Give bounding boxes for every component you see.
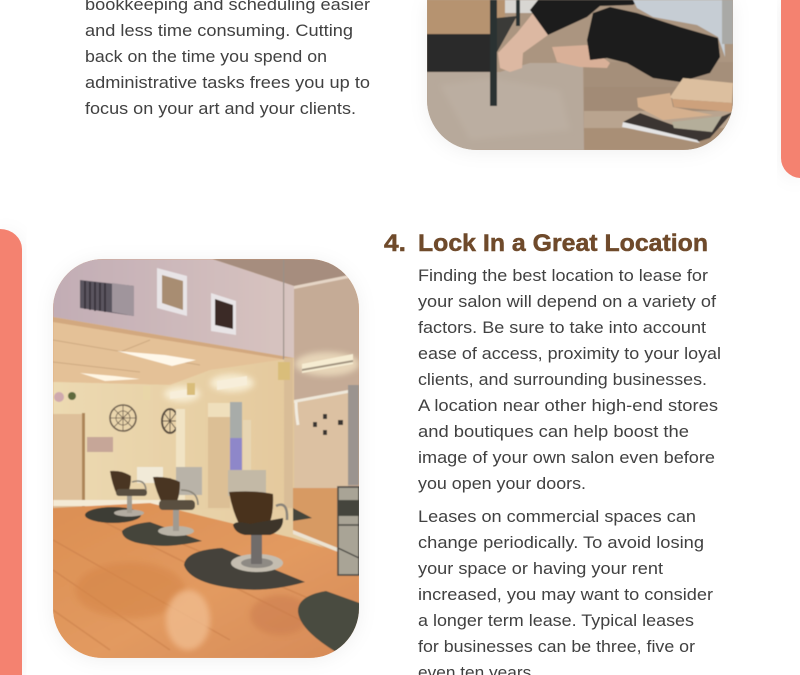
body paragraph: finding a location — [418, 266, 721, 493]
body text: previous section: administrative tasks frees you up to — [85, 73, 370, 92]
body paragraph: leases: a longer term lease. Typical leases — [418, 611, 694, 630]
body paragraph: finding a location: you open your doors. — [418, 474, 586, 493]
body paragraph: leases: for businesses can be three, five or — [418, 637, 695, 656]
body paragraph: finding a location: A location near other high-end stores — [418, 396, 718, 415]
body text: previous section — [85, 0, 370, 118]
body paragraph: finding a location: factors. Be sure to take into account — [418, 318, 706, 337]
body paragraph: finding a location: ease of access, proximity to your loyal — [418, 344, 721, 363]
body paragraph: leases: change periodically. To avoid losing — [418, 533, 704, 552]
body text: previous section: focus on your art and your clients. — [85, 99, 356, 118]
body paragraph: finding a location: your salon will depend on a variety of — [418, 292, 716, 311]
body paragraph: finding a location: clients, and surrounding businesses. — [418, 370, 707, 389]
body text: previous section: back on the time you spend on — [85, 47, 327, 66]
body text: previous section: and less time consuming. Cutting — [85, 21, 353, 40]
photo: hair salon interior — [53, 259, 365, 660]
body paragraph: finding a location: image of your own salon even before — [418, 448, 715, 467]
body paragraph: leases — [418, 507, 713, 675]
coral side bar: left — [0, 229, 22, 675]
heading number: 4. — [384, 230, 406, 257]
body paragraph: finding a location: Finding the best location to lease for — [418, 266, 708, 285]
body paragraph: leases: your space or having your rent — [418, 559, 663, 578]
heading: Lock In a Great Location — [418, 230, 708, 257]
photo: woman sitting on floor with books — [427, 0, 733, 150]
body paragraph: leases: increased, you may want to consider — [418, 585, 713, 604]
coral side bar: top right — [781, 0, 800, 178]
body paragraph: finding a location: and boutiques can help boost the — [418, 422, 689, 441]
body paragraph: leases: Leases on commercial spaces can — [418, 507, 696, 526]
